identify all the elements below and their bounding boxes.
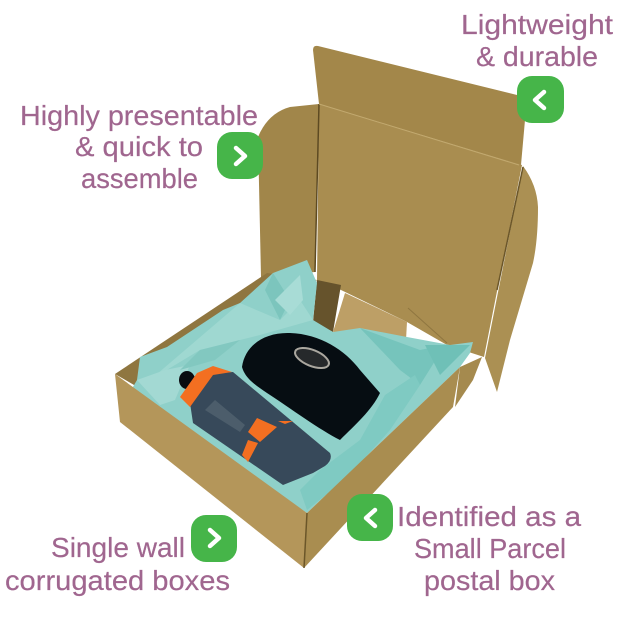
bottle shading bbox=[205, 400, 245, 432]
callout: identified as small parcel bbox=[347, 494, 589, 596]
box right tab bbox=[455, 357, 482, 407]
right side flap bbox=[485, 166, 538, 392]
icon: right chevron button bbox=[217, 132, 263, 179]
bottle cap bbox=[179, 371, 195, 389]
lid top flap bbox=[313, 46, 525, 165]
box front right wall bbox=[304, 367, 460, 568]
case logo bbox=[292, 344, 332, 372]
corner edge bbox=[304, 513, 307, 568]
icon: left chevron button bbox=[517, 76, 564, 123]
bottle bands bbox=[242, 418, 277, 462]
left side flap bbox=[258, 104, 319, 277]
glasses case bbox=[242, 333, 380, 440]
label: assemble bbox=[81, 163, 198, 194]
bottle body bbox=[190, 372, 331, 485]
callout: single wall bbox=[5, 515, 237, 596]
label: corrugated boxes bbox=[5, 565, 230, 596]
callout: lightweight and durable bbox=[461, 9, 621, 123]
label: Lightweight bbox=[461, 9, 613, 40]
label: & quick to bbox=[75, 131, 203, 162]
label: Single wall bbox=[51, 532, 185, 563]
icon: right chevron button bbox=[191, 515, 237, 562]
callout: highly presentable bbox=[20, 100, 266, 194]
lid main panel bbox=[317, 104, 522, 357]
open cardboard box with contents bbox=[115, 46, 538, 568]
label: postal box bbox=[424, 565, 555, 596]
box inner light flap bbox=[333, 293, 407, 340]
lid fold lines bbox=[315, 104, 523, 343]
bottle collar bbox=[180, 366, 232, 407]
label: Small Parcel bbox=[414, 533, 566, 564]
water bottle bbox=[179, 366, 331, 485]
label: Identified as a bbox=[397, 501, 581, 532]
box left inner wall bbox=[115, 273, 317, 400]
box inner back tab bbox=[313, 280, 341, 332]
icon: left chevron button bbox=[347, 494, 393, 541]
label: & durable bbox=[476, 41, 598, 72]
box front left wall bbox=[115, 374, 307, 568]
tissue paper bbox=[130, 260, 473, 513]
label: Highly presentable bbox=[20, 100, 258, 131]
